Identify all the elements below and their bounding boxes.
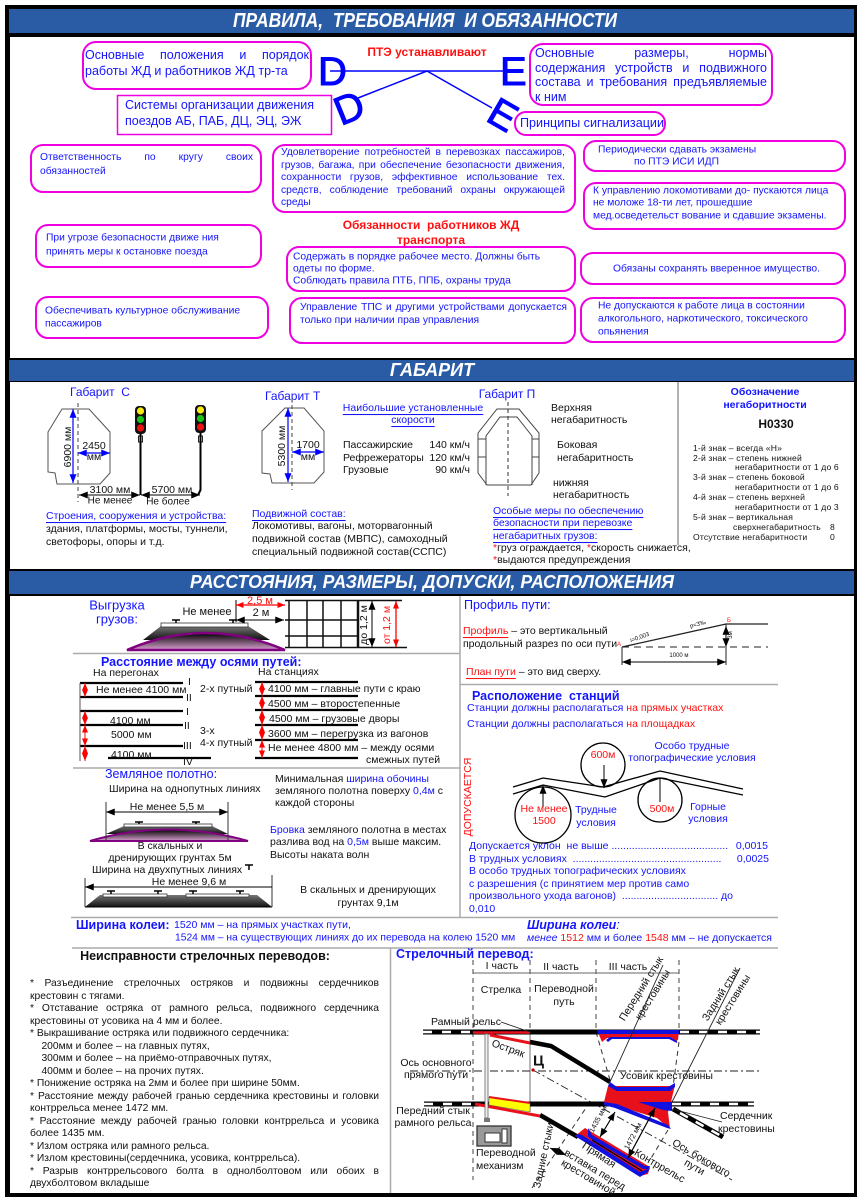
diagram: railway switch (395, 947, 775, 1199)
text: oversize notation: 3-й знак – степень боковой (693, 472, 805, 482)
text: track gauge: Ширина колеи: (76, 918, 170, 932)
box: workplace order: Содержать в порядке рабочее место. Должны быть (293, 250, 540, 262)
box: safety threat (36, 225, 261, 267)
text: rolling stock: Подвижной состав: (252, 508, 346, 520)
diagram: railway switch: III часть (609, 961, 648, 973)
text: gauge limits (527, 918, 772, 944)
text: highest speeds: Пассажирские (343, 439, 413, 451)
switch labels: Ось основного (400, 1057, 472, 1069)
diagram: cargo unloading: от 1,2 м (381, 606, 393, 644)
box: workplace order: Соблюдать правила ПТБ, ППБ, охраны труда (293, 274, 511, 286)
text: embankment edge: Бровка земляного полотна в местах (270, 824, 447, 836)
diagram: cargo unloading: грузов: (96, 612, 138, 626)
diagram: roadbed single track: В скальных и (138, 840, 203, 852)
text: shoulder width (275, 773, 443, 809)
diagram: curve radii: Не менее (521, 803, 568, 815)
diagram: distances at stations: Не менее 4800 мм – между осями (268, 742, 434, 754)
text: embankment edge: разлива вод на 0,5м выше максим. (270, 836, 441, 848)
header: gabarit: ГАБАРИТ (390, 360, 476, 380)
text: allowed gradients: 0,0015 (736, 840, 768, 852)
diagram: distances on hauls: 5000 мм (111, 729, 152, 741)
diagram: gabarit P (478, 387, 634, 501)
text: shoulder width: Минимальная ширина обочины (275, 773, 429, 785)
diagram: roadbed single track (90, 767, 261, 864)
text: switch faults list: 400мм и более – на прочих путях. (41, 1066, 204, 1076)
text: gauge limits: Ширина колеи: (527, 918, 620, 932)
chart: profile slope: 3м (728, 631, 734, 639)
diagram: roadbed double track: Ширина на двухпутных линиях (92, 864, 243, 876)
diagram: gabarit C: 5700 мм (152, 484, 192, 496)
text: oversize notation: 2-й знак – степень нижней (693, 453, 802, 463)
text: oversize notation: Н0330 (758, 417, 794, 431)
chart: profile slope (617, 618, 768, 665)
diagram: gabarit T: 1700 (296, 439, 320, 451)
diagram: cargo unloading: до 1,2 м (358, 605, 370, 645)
text: track gauge (76, 918, 515, 944)
text: track profile: Профиль пути: (464, 598, 551, 612)
diagram: D and E letters: E (480, 90, 525, 141)
text: oversize notation: Обозначение (731, 386, 799, 398)
text: special measures: Особые меры по обеспечению (493, 505, 643, 517)
box: periodic exams (584, 141, 845, 171)
text: rocky soils: грунтах 9,1м (337, 897, 399, 909)
chart: profile slope: А (617, 642, 621, 648)
diagram: roadbed double track: Не менее 9,6 м (152, 876, 226, 888)
text: shoulder width: земляного полотна поверху 0,4м с (275, 785, 443, 797)
dividers (71, 596, 778, 1193)
diagram: curve radii: топографические условия (628, 752, 756, 764)
text: allowed gradients: В трудных условиях ................................................... (469, 853, 721, 865)
text: switch faults list: 200мм и более – на главных путях, (41, 1040, 210, 1052)
heading: duties of workers: транспорта (397, 233, 465, 247)
diagram: curve radii: Горные (690, 801, 726, 813)
text: allowed gradients: с разрешения (с принятием мер против само (469, 878, 689, 890)
chart: profile slope: i=0,003 (630, 632, 651, 644)
box: not admitted (581, 298, 845, 342)
heading: switch faults: Неисправности стрелочных переводов: (80, 949, 330, 963)
switch labels: Ось бокового (670, 1137, 732, 1180)
header: rules (9, 9, 854, 33)
text: allowed gradients: Допускается уклон не выше ........................................ (469, 840, 728, 852)
text: track gauge: 1520 мм – на прямых участках пути, (174, 919, 351, 931)
text: switch faults list (30, 978, 379, 1193)
diagram: gabarit C: 6900 мм (62, 427, 74, 467)
diagram: gabarit C (48, 385, 200, 508)
panel: gabarit (10, 382, 854, 569)
diagram: gabarit P: Верхняя (551, 402, 592, 414)
box: basic dimensions: Основные размеры, нормы содержания устройств и подвижного состава и требования предъявляемые к ним (535, 46, 767, 104)
text: rocky soils (300, 884, 437, 909)
panel: distances and switches (10, 596, 854, 1193)
text: highest speeds: Рефрежераторы (343, 452, 424, 464)
switch labels: Задние стыки (531, 1121, 557, 1189)
diagram: gabarit T: 5300 мм (276, 426, 288, 466)
header: gabarit (9, 360, 854, 381)
text: highest speeds: скорости (391, 414, 435, 426)
switch labels: Задний стык (700, 965, 743, 1023)
text: track gauge: 1524 мм – на существующих линиях до их перевода на колею 1520 мм (175, 932, 515, 944)
text: shoulder width: каждой стороны (275, 797, 354, 809)
box: safety threat: При угрозе безопасности движе ния (46, 232, 219, 244)
diagram: roadbed single track: Ширина на однопутных линиях (109, 783, 261, 795)
switch labels: механизм (476, 1160, 524, 1172)
panel: rules and duties (10, 37, 854, 358)
box: traffic systems: Системы организации движения (125, 98, 314, 112)
diagram: railway switch: I часть (486, 960, 519, 972)
header: rules: ПРАВИЛА, ТРЕБОВАНИЯ И ОБЯЗАННОСТИ (233, 10, 618, 32)
box: traffic systems: поездов АБ, ПАБ, ДЦ, ЭЦ, ЭЖ (125, 114, 302, 128)
diagram: curve radii: условия (576, 817, 616, 829)
text: highest speeds: 140 км/ч (429, 439, 470, 451)
diagram: curve radii: Трудные (575, 804, 617, 816)
diagram: gabarit C: 2450 (82, 440, 106, 452)
text: rolling stock: Локомотивы, вагоны, моторвагонный (252, 520, 433, 532)
text: switch faults list: * Излом крестовины(сердечника, усовика, контррельса). (30, 1153, 300, 1164)
diagram: distances on hauls (80, 667, 253, 768)
switch labels: рамного рельса (395, 1117, 472, 1129)
text: structures: Строения, сооружения и устройства: (46, 510, 226, 522)
text: oversize notation: негабаритности от 1 до 6 (735, 462, 839, 472)
text: oversize notation (693, 386, 839, 542)
diagram: roadbed single track: Не менее 5,5 м (130, 801, 204, 813)
text: switch faults list: * Отставание остряка от рамного рельса, подвижного сердечника крестовины от усовика на 4 мм и более. (30, 1003, 379, 1026)
box: traffic systems (118, 96, 332, 134)
diagram: gabarit T: Габарит Т (265, 389, 321, 403)
box: periodic exams: Периодически сдавать экзамены (598, 144, 756, 156)
text: allowed gradients: В особо трудных топографических условиях (469, 865, 687, 877)
diagram: railway switch: путь (553, 996, 575, 1008)
box: cultural service: Обеспечивать культурное обслуживание (45, 304, 240, 316)
switch labels: Остряк (490, 1037, 527, 1060)
box: satisfying demand: Удовлетворение потребностей в перевозках пассажиров, грузов, багажа, при обеспечение безопасности движения, сохранности грузов, эффективное использование тех. средств, соблюдение требований охраны окружающей среды (281, 147, 565, 208)
text: oversize notation: 0 (830, 532, 835, 542)
box: cultural service: пассажиров (45, 318, 102, 330)
switch labels: крестовины (718, 1123, 775, 1135)
text: switch faults list: * Расстояние между рабочей гранью головки контррельса и усовика более 1435 мм. (30, 1116, 379, 1139)
chart: profile slope: Б (727, 618, 731, 624)
switch labels: Передний стык (396, 1105, 470, 1117)
switch labels: Сердечник (720, 1110, 773, 1122)
text: oversize notation: негабаритности от 1 до 6 (735, 482, 839, 492)
text: switch faults list: * Излом остряка или рамного рельса. (30, 1140, 209, 1152)
diagram: curve radii (462, 740, 756, 843)
diagram: gabarit P: Боковая (557, 439, 597, 451)
box: locomotive admission: К управлению локомотивами до- пускаются лица (593, 186, 829, 196)
box: not admitted: опьянения (598, 326, 649, 338)
diagram: distances at stations: смежных путей (366, 754, 440, 766)
diagram: cargo unloading: 2 м (253, 607, 269, 619)
text: oversize notation: сверхнегабаритность (733, 522, 821, 532)
box: preserve property: Обязаны сохранять вверенное имущество. (613, 262, 820, 274)
diagram: gabarit P: негабаритность (557, 452, 634, 464)
box: responsibility: Ответственность по кругу своих обязанностей (40, 152, 253, 177)
text: special measures: безопасности при перевозке (493, 517, 633, 529)
text: oversize notation: 8 (830, 522, 835, 532)
diagram: railway switch: Переводной (534, 983, 594, 995)
box: control licence: Управление ТПС и другими устройствами допускается только при наличии прав управления (300, 302, 567, 326)
diagram: D and E letters: D (318, 50, 347, 94)
diagram: distances at stations: 4500 мм – второстепенные (268, 698, 400, 710)
box: preserve property (581, 253, 845, 284)
diagram: gabarit P: Габарит П (479, 387, 535, 401)
diagram: roadbed single track: Земляное полотно: (105, 767, 217, 781)
text: structures: здания, платформы, мосты, туннели, (46, 523, 228, 535)
diagram: railway switch: Стрелочный перевод: (396, 947, 534, 961)
box: locomotive admission: не моложе 18-ти лет, прошедшие (593, 198, 753, 208)
text: oversize notation: Отсутствие негабаритности (693, 532, 807, 542)
text: allowed gradients (469, 840, 769, 915)
diagram: D and E letters (318, 50, 527, 141)
chart: profile slope: p=3‰ (689, 620, 707, 630)
text: oversize notation: 5-й знак – вертикальная (693, 512, 793, 522)
text: rolling stock (252, 508, 448, 558)
text: oversize notation: 1-й знак – всегда «Н» (693, 443, 782, 453)
text: track profile: Профиль – это вертикальный (463, 625, 608, 637)
text: highest speeds: Наибольшие установленные (343, 402, 483, 414)
text: switch faults list: 300мм и более – на приёмо-отправочных путях, (41, 1053, 271, 1064)
switch labels: крестовины (713, 973, 753, 1027)
text: highest speeds: 90 км/ч (435, 464, 470, 476)
text: station location: Станции должны располагаться на площадках (467, 718, 696, 730)
switch labels: 1472 мм (622, 1121, 644, 1151)
text: oversize notation: негаборитности (723, 399, 807, 411)
diagram: distances on hauls: 4100 мм (111, 749, 152, 761)
box: locomotive admission (584, 183, 845, 229)
box: workplace order (287, 247, 575, 291)
diagram: curve radii: условия (688, 813, 728, 825)
diagram: curve radii: ДОПУСКАЕТСЯ (462, 758, 474, 836)
heading: duties of workers: Обязанности работников ЖД (343, 218, 520, 232)
box: not admitted: Не допускаются к работе лица в состоянии (598, 300, 805, 312)
diagram: railway switch: Стрелка (481, 984, 521, 996)
diagram: distances on hauls: II (186, 692, 192, 704)
text: rolling stock: подвижной состав (МВПС), самоходный (252, 533, 448, 545)
diagram: distances at stations (255, 666, 440, 766)
diagram: distances on hauls: 3-х (200, 725, 215, 737)
diagram: distances on hauls: I (188, 676, 191, 688)
heading: duties of workers (343, 218, 520, 247)
switch labels: крестовины (633, 968, 673, 1022)
text: allowed gradients: 0,010 (469, 903, 495, 915)
diagram: gabarit C: 3100 мм (90, 484, 130, 496)
diagram: railway switch: II часть (543, 961, 579, 973)
diagram: roadbed single track: дренирующих грунтах 5м (108, 852, 232, 864)
heading: PTE establishes: ПТЭ устанавливают (367, 45, 487, 59)
text: switch faults list: * Выкрашивание остряка или подвижного сердечника: (30, 1028, 289, 1039)
diagram: curve radii: Особо трудные (655, 740, 730, 752)
diagram: distances at stations: 4100 мм – главные пути с краю (268, 683, 421, 695)
diagram: gabarit P: негабаритность (551, 414, 628, 426)
text: rolling stock: специальный подвижной состав(ССПС) (252, 546, 446, 558)
text: track profile: План пути – это вид сверху. (466, 666, 601, 678)
text: switch faults list: * Расстояние между рабочей гранью сердечника крестовины и головки контррельса менее 1472 мм. (30, 1090, 379, 1114)
text: oversize notation: негабаритности от 1 до 3 (735, 502, 839, 512)
text: rocky soils: В скальных и дренирующих (300, 884, 437, 896)
switch labels: прямого пути (404, 1069, 468, 1081)
text: station location: Станции должны располагаться на прямых участках (467, 702, 724, 714)
diagram: distances at stations: На станциях (258, 666, 319, 678)
diagram: gabarit C: мм (87, 451, 101, 463)
box: basic provisions (83, 42, 311, 89)
diagram: roadbed double track (85, 864, 272, 907)
box: periodic exams: по ПТЭ ИСИ ИДП (634, 156, 719, 168)
diagram: D and E letters: E (500, 50, 527, 94)
box: signalling principles: Принципы сигнализации (520, 116, 664, 130)
text: special measures: *выдаются предупреждения (493, 554, 630, 566)
diagram: cargo unloading: Выгрузка (89, 598, 146, 612)
box: signalling principles (515, 112, 665, 135)
text: special measures: негабаритных грузов: (493, 530, 598, 542)
text: track profile (463, 598, 617, 678)
text: switch faults list: * Разрыв контррельсового болта в однолболтовом или обоих в двухболтовом вкладыше (30, 1166, 379, 1189)
text: switch faults list: * Разъединение стрелочных остряков и подвижны сердечников крестовин с тягами. (30, 978, 379, 1002)
box: locomotive admission: мед.осведетельст вование и сдавшие экзамены. (593, 210, 826, 222)
diagram: distances on hauls: IV (183, 756, 193, 768)
divider (677, 382, 679, 545)
diagram: distances on hauls: 4-х путный (200, 737, 253, 749)
diagram: curve radii: 600м (591, 749, 615, 761)
switch labels: пути (682, 1157, 707, 1178)
box: responsibility (31, 145, 261, 192)
switch labels: Переводной (476, 1147, 536, 1159)
diagram: distances on hauls: 4100 мм (110, 715, 151, 727)
switch labels: Ц (533, 1052, 544, 1070)
text: highest speeds: 120 км/ч (429, 452, 470, 464)
diagram: distances on hauls: I (186, 706, 189, 718)
switch labels: Усовик крестовины (620, 1070, 713, 1082)
text: station location (467, 689, 724, 730)
text: embankment edge (270, 824, 447, 861)
switch labels: 1435 мм (587, 1104, 609, 1134)
switch labels: Прямая (580, 1140, 618, 1171)
text: track profile: продольный разрез по оси пути (463, 638, 617, 650)
diagram: gabarit T (262, 389, 324, 490)
text: highest speeds (343, 402, 483, 476)
box: control licence (290, 298, 575, 343)
diagram: distances on hauls: II (184, 720, 190, 732)
diagram: gabarit P: негабаритность (553, 489, 630, 501)
diagram: gabarit C: Габарит С (70, 385, 130, 399)
text: oversize notation: 4-й знак – степень верхней (693, 492, 805, 502)
diagram: distances on hauls: 2-х путный (200, 683, 253, 695)
switch labels: Рамный рельс (431, 1016, 501, 1028)
diagram: distances on hauls: III (183, 740, 192, 752)
text: embankment edge: Высоты наката волн (270, 849, 370, 861)
text: station location: Расположение станций (472, 689, 620, 703)
switch labels: Контррельс (632, 1147, 687, 1185)
box: basic provisions: Основные положения и порядок работы ЖД и работников ЖД тр-та (85, 48, 309, 78)
text: structures (46, 510, 228, 548)
box: safety threat: принять меры к остановке поезда (46, 246, 208, 258)
chart: profile slope: 1000 м (669, 653, 689, 659)
box: workplace order: одеты по форме. (293, 262, 375, 274)
box: cultural service (36, 297, 268, 338)
switch labels: Передний стык (617, 954, 666, 1023)
diagram: curve radii: 1500 (532, 815, 556, 827)
diagram: gabarit C: Не более (146, 496, 190, 508)
text: allowed gradients: произвольного ухода вагонов) ................................. до (469, 890, 733, 902)
text: allowed gradients: 0,0025 (737, 853, 769, 865)
text: highest speeds: Грузовые (343, 464, 389, 476)
diagram: cargo unloading: Не менее (182, 606, 232, 618)
text: switch faults list: * Понижение остряка на 2мм и более при ширине 50мм. (30, 1078, 300, 1089)
switch labels (395, 954, 775, 1199)
diagram: gabarit T: мм (301, 451, 315, 463)
header: distances (9, 571, 854, 594)
diagram: gabarit P: нижняя (553, 477, 589, 489)
box: not admitted: алкогольного, наркотического, токсического (598, 314, 808, 324)
text: special measures (493, 505, 691, 566)
header: distances: РАССТОЯНИЯ, РАЗМЕРЫ, ДОПУСКИ, РАСПОЛОЖЕНИЯ (190, 572, 675, 592)
text: special measures: *груз ограждается, *скорость снижается, (493, 542, 691, 554)
diagram: cargo unloading (89, 595, 407, 650)
diagram: distances on hauls: Не менее 4100 мм (96, 684, 187, 696)
diagram: D and E letters: D (328, 83, 371, 134)
icon: signal 1 (135, 406, 146, 495)
diagram: distances at stations: 4500 мм – грузовые дворы (269, 713, 399, 725)
icon: signal 2 (195, 405, 206, 495)
diagram: distances on hauls: На перегонах (93, 667, 160, 679)
diagram: distances at stations: 3600 мм – перегрузка из вагонов (268, 728, 429, 740)
diagram: gabarit C: Не менее (88, 496, 133, 506)
switch labels: вставка перед (562, 1147, 628, 1193)
heading: track axis distance: Расстояние между осями путей: (101, 655, 302, 669)
text: gauge limits: менее 1512 мм и более 1548 мм – не допускается (527, 932, 772, 944)
diagram: curve radii: 500м (650, 803, 674, 815)
text: structures: светофоры, опоры и т.д. (46, 536, 164, 548)
